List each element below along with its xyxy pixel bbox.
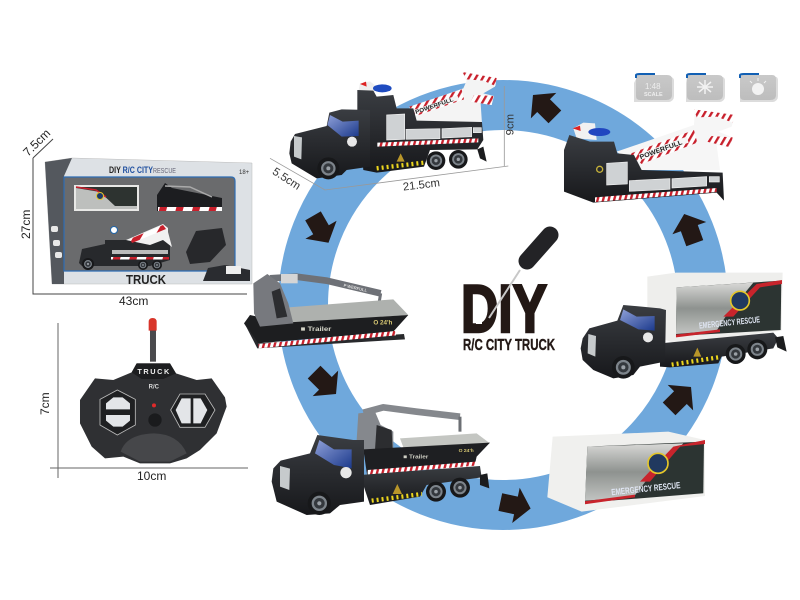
DIY: DIY xyxy=(461,271,547,347)
chassis xyxy=(660,333,778,367)
boom label plate xyxy=(413,95,459,114)
remote grip shading xyxy=(121,433,187,462)
box dimension labels: 27cm xyxy=(19,210,33,239)
dimension lines xyxy=(270,86,508,190)
box subtitle: RESCUE xyxy=(153,168,176,175)
crane tower xyxy=(357,412,393,453)
icon: disassembly xyxy=(686,74,725,102)
container graphic xyxy=(676,281,781,336)
grille xyxy=(294,136,302,159)
icon: 1:48 scale: SCALE xyxy=(644,92,663,98)
panel: assembled tow truck xyxy=(270,72,516,194)
arm label: P WERFULL xyxy=(343,283,368,293)
logo xyxy=(597,166,603,172)
panel: detached container xyxy=(547,432,705,512)
boom label: POWERFULL xyxy=(639,139,683,161)
dimension labels: 9cm xyxy=(504,114,516,135)
bed label: ■ Trailer xyxy=(301,326,332,333)
container body xyxy=(647,273,783,344)
panel: crane module xyxy=(564,109,735,203)
crane tower detail xyxy=(272,288,287,318)
front wheel xyxy=(317,157,339,179)
box footer truck xyxy=(203,265,250,281)
arrow 2: right xyxy=(667,208,712,249)
boom label plate xyxy=(639,137,689,160)
bed top xyxy=(288,299,408,323)
flat bed top xyxy=(400,433,490,452)
remote dimension labels: 7cm xyxy=(38,392,52,415)
box body xyxy=(45,158,252,284)
crane arm xyxy=(270,277,381,293)
hazard chevrons xyxy=(672,357,721,365)
boom xyxy=(617,109,735,170)
chassis xyxy=(360,466,482,505)
cab xyxy=(289,109,370,178)
cab emblem xyxy=(340,467,352,478)
boom stripes xyxy=(409,72,497,116)
reflective stripe xyxy=(368,462,476,475)
rear hitch xyxy=(477,147,487,162)
container photo xyxy=(676,283,753,334)
crane tower detail xyxy=(375,425,393,450)
boom xyxy=(409,72,497,123)
dimension labels: 5.5cm xyxy=(270,166,302,193)
red swoosh xyxy=(676,280,782,337)
cab xyxy=(581,305,666,378)
badge xyxy=(648,453,668,473)
panel: container truck xyxy=(581,273,787,379)
hazard badge xyxy=(693,348,701,357)
cab emblem xyxy=(643,332,653,342)
side panels xyxy=(607,162,719,191)
beacon xyxy=(573,123,610,140)
arrow 1: top right xyxy=(520,82,568,130)
box dimension lines xyxy=(33,139,247,294)
box dimension labels: 7.5cm xyxy=(20,126,53,159)
cab xyxy=(272,435,364,515)
cab window xyxy=(620,309,655,331)
icon: 1:48 scale: 1:48 xyxy=(645,82,661,91)
box dimension labels xyxy=(19,126,148,308)
rear wheel 1 xyxy=(426,482,446,502)
antenna xyxy=(149,318,157,362)
panel: packaged box xyxy=(19,126,252,308)
R/C CITY TRUCK: R/C CITY TRUCK xyxy=(463,337,555,354)
remote body xyxy=(80,363,227,463)
remote label R/C: R/C xyxy=(149,385,160,391)
grille xyxy=(588,334,596,357)
crane hook xyxy=(455,417,464,432)
arrow 6: upper left xyxy=(297,207,344,252)
flat bed xyxy=(363,443,490,477)
remote in zoom coordinates xyxy=(80,318,227,463)
remote LED and knob xyxy=(148,403,162,427)
icon: light xyxy=(740,74,778,102)
rear wheel 1 xyxy=(726,344,746,364)
remote dimension labels xyxy=(38,392,166,483)
crane arm xyxy=(363,407,460,417)
boom label: POWERFULL xyxy=(415,97,455,116)
arrow 5: lower left xyxy=(301,359,349,407)
remote top badge xyxy=(132,363,176,379)
red swoosh xyxy=(585,440,705,504)
box band buttons xyxy=(51,226,62,258)
hazard badge xyxy=(397,153,405,162)
D cutout xyxy=(476,300,482,324)
box window xyxy=(64,177,235,271)
rear wheel 1 xyxy=(427,151,445,170)
arrow 3: lower right xyxy=(656,374,704,422)
badge xyxy=(731,291,749,310)
cab window xyxy=(315,440,352,468)
crane tower xyxy=(253,274,293,327)
panel: flatbed tow truck xyxy=(272,407,490,515)
screwdriver handle xyxy=(527,235,550,261)
hazard badge xyxy=(393,484,402,494)
label: EMERGENCY RESCUE xyxy=(611,480,681,497)
remote dimension lines xyxy=(50,323,248,478)
arrow 4: bottom xyxy=(497,484,534,526)
box title: DIY R/C CITY xyxy=(109,165,153,176)
cab window xyxy=(327,115,359,137)
rear hitch xyxy=(480,473,489,488)
bed time label: O 24'h xyxy=(459,448,474,454)
rear module xyxy=(357,90,483,173)
icon: 1:48 scale xyxy=(634,74,674,102)
reflective stripe xyxy=(377,138,478,147)
hazard chevrons xyxy=(372,494,422,501)
beacon xyxy=(358,81,392,95)
arm checker xyxy=(281,274,298,283)
cab emblem xyxy=(347,137,357,147)
hazard chevrons xyxy=(377,163,424,168)
panel: flatbed module xyxy=(244,274,408,348)
grille xyxy=(280,466,290,490)
panel: remote control xyxy=(38,318,248,483)
remote label TRUCK: TRUCK xyxy=(137,367,170,376)
remote right buttons xyxy=(171,394,215,427)
screwdriver shaft xyxy=(489,270,520,318)
circular process ring xyxy=(303,105,703,505)
dimension labels xyxy=(270,114,516,194)
reflective stripe xyxy=(258,331,396,348)
rear wheel 2 xyxy=(747,339,767,359)
base plate xyxy=(244,322,405,348)
rear wheel 2 xyxy=(450,478,470,498)
box dimension labels: 43cm xyxy=(119,294,148,308)
crane hook xyxy=(378,293,381,309)
box age tag: 18+ xyxy=(239,170,250,176)
container body xyxy=(547,432,705,512)
reflective stripe xyxy=(595,188,717,202)
dimension labels: 21.5cm xyxy=(402,177,441,194)
box contents: remote xyxy=(186,228,226,264)
remote left buttons xyxy=(100,390,135,435)
box contents: flatbed xyxy=(157,183,222,211)
box contents: truck xyxy=(79,224,172,270)
front wheel xyxy=(612,356,635,379)
box contents: container xyxy=(74,185,139,211)
base xyxy=(564,135,724,203)
side panels xyxy=(387,114,481,140)
label: EMERGENCY RESCUE xyxy=(698,314,761,331)
center logo xyxy=(461,235,555,354)
box left band xyxy=(45,158,72,284)
bed time label: O 24'h xyxy=(373,319,393,326)
bed side xyxy=(244,315,408,343)
container photo xyxy=(585,443,683,501)
boom stripes xyxy=(629,109,735,164)
bed label: ■ Trailer xyxy=(403,455,429,461)
rear wheel 2 xyxy=(449,150,468,169)
front wheel xyxy=(308,492,331,515)
remote dimension labels: 10cm xyxy=(137,469,166,483)
rear hitch xyxy=(775,336,787,352)
container graphic xyxy=(585,442,704,503)
box title: TRUCK: TRUCK xyxy=(126,272,167,287)
